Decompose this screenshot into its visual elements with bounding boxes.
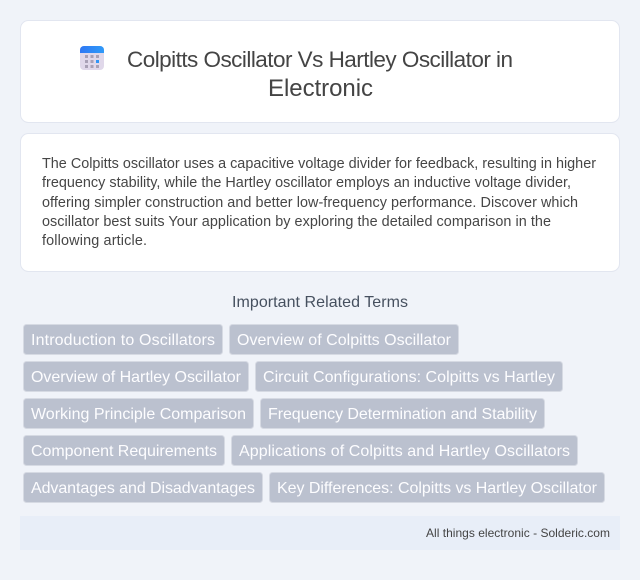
tag: Component Requirements: Component Requirements (31, 443, 217, 460)
text block: description (42, 156, 596, 249)
tag: Advantages and Disadvantages: Advantages and Disadvantages (31, 480, 255, 497)
panel: description (20, 134, 620, 272)
panel: title header (20, 20, 620, 122)
tag: Working Principle Comparison: Working Principle Comparison (31, 406, 246, 423)
text block: description: offering simpler construction and better low-frequency performance. Discover which (42, 195, 578, 211)
text block: description: The Colpitts oscillator uses a capacitive voltage divider for feedback, resulting in higher (42, 156, 596, 172)
footer: All things electronic - Solderic.com (426, 526, 610, 540)
title: Colpitts Oscillator Vs Hartley Oscillator in (127, 47, 513, 72)
text block: description: oscillator best suits Your application by exploring the detailed comparison in the (42, 214, 551, 230)
heading: important related terms: Important Related Terms (232, 294, 408, 311)
footer (20, 516, 620, 550)
title: Electronic (268, 75, 373, 102)
tag: Circuit Configurations: Circuit Configurations: Colpitts vs Hartley (263, 369, 555, 386)
title (127, 47, 513, 102)
tag: Key Differences: Key Differences: Colpitts vs Hartley Oscillator (277, 480, 598, 497)
tag: Circuit Configurations (256, 362, 562, 392)
tag: Frequency Determination and Stability: Frequency Determination and Stability (268, 406, 537, 423)
tag: Introduction to Oscillators: Introduction to Oscillators (31, 332, 215, 349)
tag: Frequency Determination and Stability (260, 398, 544, 428)
tag: Overview of Colpitts Oscillator: Overview of Colpitts Oscillator (237, 332, 452, 349)
icon: calendar grid (80, 46, 104, 70)
tag: Applications (232, 436, 578, 466)
tag: Overview of Hartley Oscillator (24, 362, 248, 392)
tag: Key Differences (270, 472, 604, 502)
tag: Introduction to Oscillators (24, 324, 222, 354)
text block: description: frequency stability, while the Hartley oscillator employs an inductive voltage divider, (42, 175, 571, 191)
tag: Advantages and Disadvantages (24, 472, 262, 502)
tag: Applications: Applications of Colpitts and Hartley Oscillators (239, 443, 570, 460)
tag: Component Requirements (24, 436, 224, 466)
text block: description: following article. (42, 233, 147, 249)
tag: Working Principle Comparison (24, 398, 254, 428)
tag: Overview of Colpitts Oscillator (230, 324, 458, 354)
tag: Overview of Hartley Oscillator: Overview of Hartley Oscillator (31, 369, 242, 386)
